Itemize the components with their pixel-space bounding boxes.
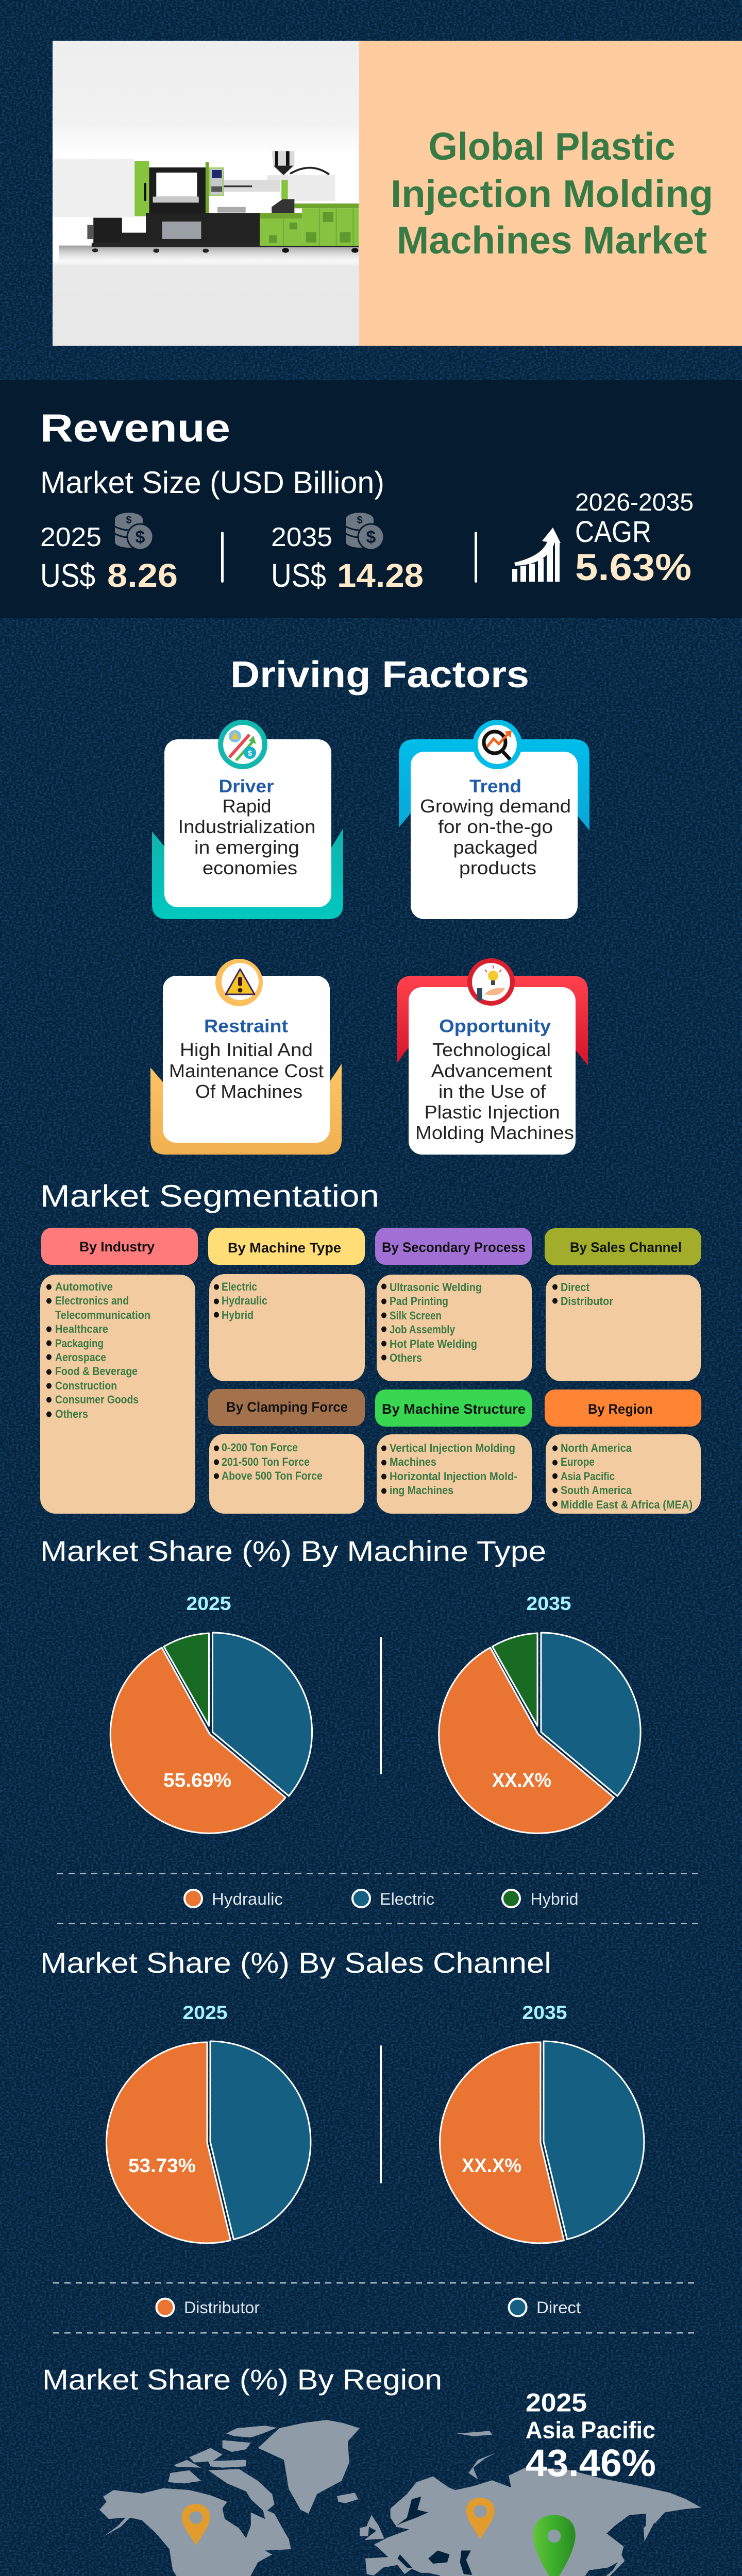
segment: by region: Middle East & Africa (MEA) [561,1498,693,1511]
2035 value: 14.28 [337,557,424,594]
restraint text [169,1039,324,1102]
card: opportunity [397,958,588,1155]
segment: by machine structure: Vertical Injection Molding [390,1442,515,1454]
segment: by sales channel [545,1228,701,1381]
divider [221,532,224,583]
year label 2025: 2025 [187,1593,231,1614]
pie chart: sales channel 2025: 53.73% [128,2155,196,2177]
panel: hero banner [53,41,742,346]
pie chart: machine type 2035 [439,1633,640,1833]
segment: by clamping force: 0-200 Ton Force [222,1441,298,1454]
segment: by machine structure: Horizontal Injection Mold- [390,1470,517,1483]
legend: machine type: Hydraulic [212,1890,283,1908]
restraint text: High Initial And [180,1039,313,1060]
segment: by secondary process: Job Assembly [390,1323,456,1336]
segment: by sales channel: By Sales Channel [570,1240,682,1255]
segment: by clamping force: Above 500 Ton Force [222,1469,323,1482]
2025 value: 2025 [40,522,102,552]
hero title panel: Global Plastic [429,125,675,168]
segment: by machine type: Hybrid [222,1309,254,1321]
pin: north america [182,2504,210,2545]
restraint title: Restraint [204,1016,288,1037]
segment: by industry: Telecommunication [55,1309,150,1321]
pie chart: machine type 2035: XX.X% [492,1770,551,1791]
trend title: Trend [469,776,521,796]
year label 2025: 2025 [182,2002,228,2023]
segment: by region [545,1389,701,1514]
driver title: Driver [218,776,274,796]
segment: by machine structure [375,1389,532,1514]
segment: by industry: Healthcare [55,1323,108,1335]
segment: by secondary process: By Secondary Process [382,1240,526,1255]
driver text: economies [203,857,297,878]
callout: asia pacific share: 2025 [526,2388,587,2417]
driver text [178,795,315,878]
CAGR value: CAGR [575,515,651,549]
segment: by sales channel: Distributor [561,1295,613,1308]
2025 value: US$ [40,557,95,594]
legend: sales channel: Distributor [184,2298,260,2317]
year label 2035: 2035 [527,1593,571,1614]
legend: machine type: Electric [380,1890,434,1908]
segment: by machine structure: ing Machines [390,1484,453,1497]
segment: by secondary process: Silk Screen [390,1309,442,1322]
heading: market share by machine type: Market Share (%) By Machine Type [40,1535,546,1567]
segment: by machine type: Electric [222,1280,257,1293]
icon: coins 2025 [115,513,153,550]
heading: market share by sales channel: Market Share (%) By Sales Channel [40,1946,551,1979]
segment: by industry: Construction [55,1379,117,1392]
segment: by region: By Region [588,1401,653,1417]
heading: driving factors: Driving Factors [230,654,529,696]
segment: by industry: Consumer Goods [55,1393,139,1406]
CAGR value: 2026-2035 [575,489,694,516]
icon: driver [218,720,267,769]
segment: by secondary process: Others [390,1351,422,1364]
segment: by industry: Packaging [55,1337,104,1350]
segment: by region: North America [561,1442,632,1454]
pin: asia pacific highlighted [533,2515,576,2576]
year label 2035: 2035 [522,2002,567,2023]
2035 value: US$ [271,557,326,594]
icon: growth arrow [512,528,561,582]
hero title panel: Machines Market [397,218,707,262]
segment: by industry [40,1228,198,1514]
opportunity text: Plastic Injection [425,1101,560,1123]
panel: revenue [0,380,742,618]
segment: by machine type: Hydraulic [222,1294,267,1307]
driver text: Rapid [223,795,271,817]
segment: by industry: Food & Beverage [55,1365,138,1378]
callout: asia pacific share: Asia Pacific [526,2417,655,2444]
segment: by clamping force [208,1389,365,1514]
icon: coins 2035: $ [366,528,376,547]
hero title panel [359,41,742,346]
divider [475,532,477,583]
restraint text: Of Machines [195,1081,302,1102]
trend text: products [459,857,536,878]
opportunity text: in the Use of [439,1081,546,1102]
restraint text: Maintenance Cost [169,1060,324,1081]
opportunity text: Advancement [431,1060,552,1081]
segment: by industry: Automotive [55,1280,113,1293]
opportunity title: Opportunity [439,1016,551,1037]
icon: driver: $ [248,749,252,758]
legend: sales channel: Direct [536,2298,581,2317]
opportunity text: Molding Machines [415,1122,574,1143]
market size subtitle: Market Size (USD Billion) [40,465,384,500]
2035 value [271,522,424,594]
segment: by industry: By Industry [79,1239,155,1255]
segment: by region: South America [561,1484,632,1497]
CAGR value: 5.63% [575,547,692,588]
trend text [420,795,571,878]
driver text: Industrialization [178,816,315,837]
hero title panel: Injection Molding [391,172,713,215]
2025 value: 8.26 [107,557,178,594]
segment: by secondary process [375,1228,532,1381]
segment: by industry: Others [55,1408,88,1420]
segment: by region: Asia Pacific [561,1470,615,1483]
opportunity text [415,1039,574,1143]
segment: by clamping force: 201-500 Ton Force [222,1455,310,1468]
card: driver [152,720,343,919]
segment: by secondary process: Pad Printing [390,1295,448,1308]
segment: by secondary process: Hot Plate Welding [390,1337,477,1350]
segment: by secondary process: Ultrasonic Welding [390,1281,482,1294]
world map [99,2420,701,2576]
legend: machine type: Hybrid [531,1890,578,1908]
segment: by machine type [208,1228,365,1381]
callout: asia pacific share: 43.46% [526,2442,656,2484]
pie chart: machine type 2025 [110,1633,312,1833]
hero image: injection molding machine [53,41,359,346]
divider [380,2045,382,2183]
CAGR value [575,489,694,588]
pie chart: sales channel 2035: XX.X% [462,2155,521,2177]
segment: by sales channel: Direct [561,1281,590,1294]
segment: by region: Europe [561,1455,595,1468]
icon: coins 2035: $ [357,515,363,526]
icon: opportunity [467,958,515,1006]
driver text: in emerging [194,837,299,858]
pin: europe [466,2498,495,2539]
icon: restraint [215,959,263,1006]
divider [380,1637,382,1774]
segment: by machine structure: By Machine Structure [382,1401,526,1417]
trend text: Growing demand [420,795,571,817]
icon: coins 2025: $ [126,515,132,526]
icon: trend [473,720,522,769]
segment: by clamping force: By Clamping Force [226,1399,348,1415]
trend text: packaged [453,837,538,858]
icon: coins 2035 [346,513,384,550]
2025 value [40,522,178,594]
segment: by industry: Aerospace [55,1351,106,1364]
heading: market segmentation: Market Segmentation [40,1179,379,1213]
icon: coins 2025: $ [136,528,145,547]
segment: by machine structure: Machines [390,1455,436,1468]
2035 value: 2035 [271,522,332,552]
pie chart: sales channel 2025 [107,2041,311,2243]
pie chart: machine type 2025: 55.69% [163,1770,231,1791]
legend: machine type [184,1890,578,1908]
card: trend [399,720,589,919]
callout: asia pacific share [526,2388,656,2484]
pie chart: sales channel 2035 [440,2041,644,2243]
heading: market share by region: Market Share (%) By Region [42,2363,442,2396]
heading: revenue: Revenue [40,406,230,450]
opportunity text: Technological [432,1039,551,1060]
legend: sales channel [157,2298,581,2317]
card: restraint [150,959,342,1155]
trend text: for on-the-go [438,816,553,837]
segment: by machine type: By Machine Type [228,1240,341,1256]
segment: by industry: Electronics and [55,1294,129,1307]
